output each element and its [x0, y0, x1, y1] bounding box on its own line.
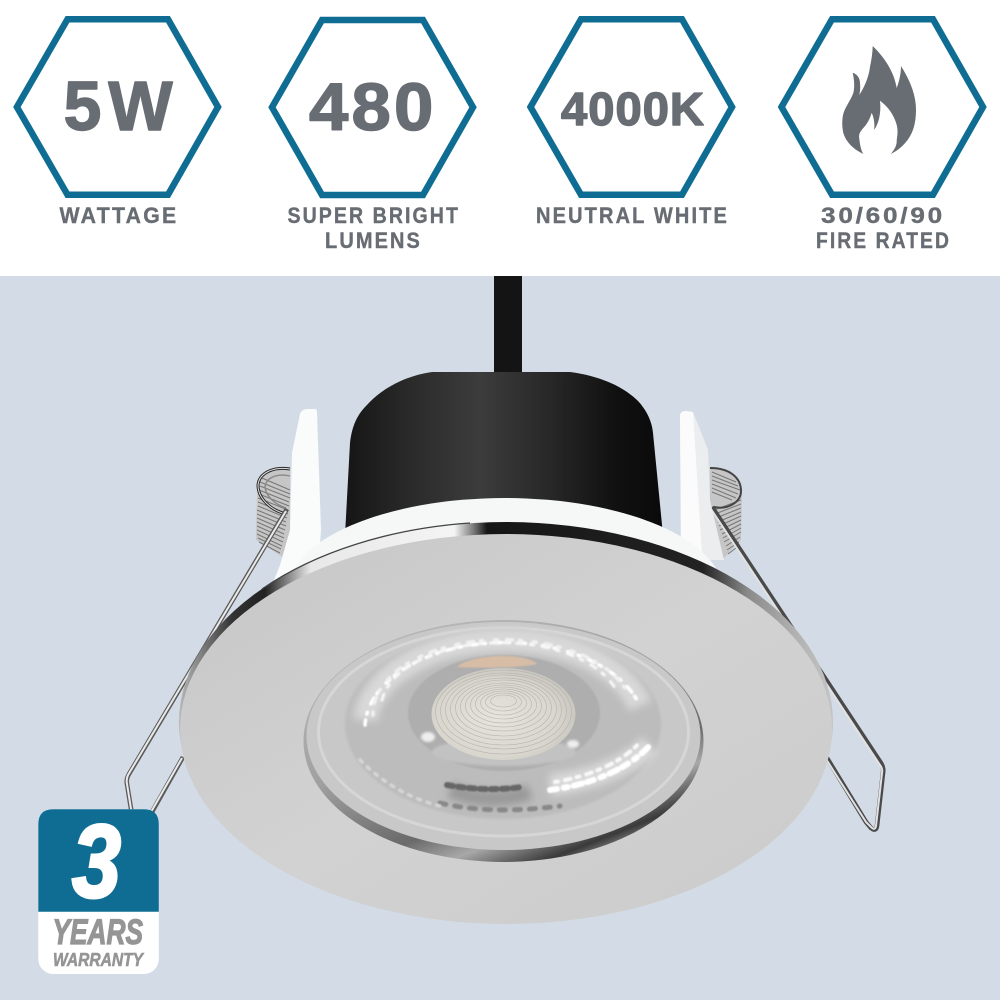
lens assembly	[304, 620, 704, 862]
lens: reflector	[345, 629, 661, 819]
white collar	[287, 498, 723, 686]
wire: left retaining clip	[127, 509, 287, 815]
white header background	[0, 0, 1000, 276]
spec: colour temperature	[530, 19, 732, 228]
hexagon: colour temperature	[530, 19, 732, 195]
value: 480: 480	[309, 70, 436, 145]
lens: warm LED glow	[457, 656, 537, 668]
chrome bezel rim	[179, 522, 833, 922]
white tab: left	[270, 409, 321, 590]
lens: outer ring	[306, 622, 700, 850]
white tab: right	[680, 411, 724, 560]
cable	[494, 276, 522, 376]
spec: wattage	[17, 19, 218, 228]
value: 4000K: 4000K	[561, 83, 705, 135]
badge: white base	[38, 809, 159, 974]
lens: central dome	[432, 668, 576, 760]
spring: left	[256, 467, 290, 558]
badge: warranty: WARRANTY	[53, 949, 144, 970]
badge: numeral 3: 3	[72, 804, 121, 920]
black driver housing	[345, 372, 663, 535]
lens: inner recess	[408, 655, 600, 771]
icon: flame	[842, 46, 916, 154]
badge: years: YEARS	[52, 913, 143, 952]
label: 30/60/90: 30/60/90	[821, 203, 945, 228]
hexagon: fire rating	[782, 19, 983, 195]
blue product background	[0, 276, 1000, 1000]
spec: lumens	[272, 20, 473, 253]
label: wattage: WATTAGE	[60, 203, 178, 228]
spec: fire rating	[782, 19, 983, 253]
reflector: sparkles	[360, 640, 650, 810]
warranty badge	[38, 804, 159, 974]
badge: teal top	[38, 809, 159, 912]
label: super bright lumens: SUPER BRIGHT	[288, 203, 460, 228]
product: downlight	[127, 276, 883, 924]
hexagon: wattage	[17, 19, 218, 195]
wire: right retaining clip	[711, 507, 883, 830]
dome: concentric texture	[436, 670, 572, 754]
bezel face	[180, 534, 832, 924]
label: lumens line: LUMENS	[325, 228, 422, 253]
reflector: soft light band	[365, 640, 650, 799]
hexagon: lumens	[272, 20, 473, 195]
label: fire rated: FIRE RATED	[816, 228, 951, 253]
label: neutral white: NEUTRAL WHITE	[536, 203, 729, 228]
lens: outer lip	[304, 620, 704, 862]
dome: soft highlights	[421, 732, 579, 748]
value: 5W: 5W	[64, 67, 180, 145]
spring: right	[710, 467, 742, 560]
thin dark edge line on rim	[262, 523, 470, 589]
